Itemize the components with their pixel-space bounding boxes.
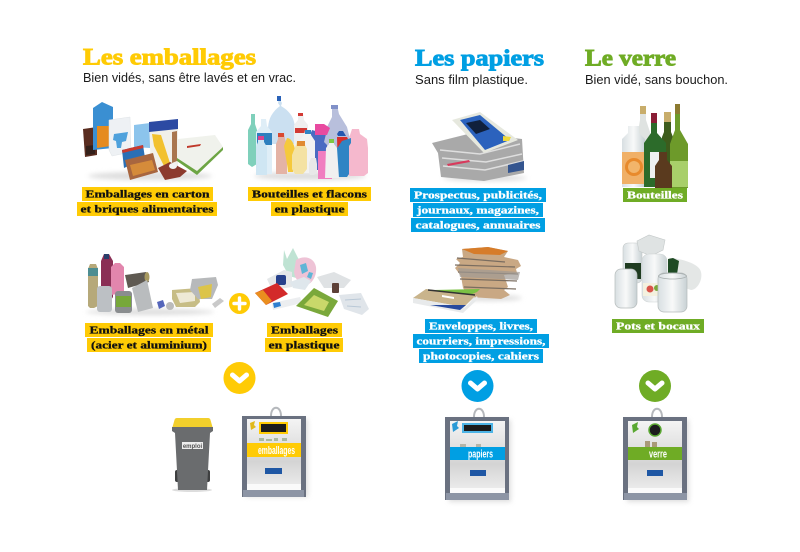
caption: pots et bocaux	[612, 319, 704, 333]
panel: le verre	[585, 46, 728, 502]
illustration: plastic bottles	[248, 96, 368, 180]
caption: bouteilles et flacons	[248, 187, 371, 216]
caption: bouteilles et flacons: en plastique	[274, 204, 345, 216]
caption: emballages en plastique: en plastique	[268, 340, 340, 352]
icon: yellow chevron	[224, 362, 256, 394]
caption: emballages en carton: et briques alimentaires	[80, 204, 214, 216]
illustration: wheeled bin: emploi	[183, 444, 202, 450]
caption: enveloppes	[413, 319, 549, 363]
illustration: emballages container poster: emballages	[258, 445, 295, 457]
caption: emballages en carton	[77, 187, 217, 216]
caption: enveloppes: photocopies, cahiers	[423, 350, 540, 362]
illustration: verre container poster	[623, 409, 689, 502]
illustration: cartons and drink cartons	[83, 102, 223, 180]
illustration: papiers container poster	[445, 409, 511, 502]
caption: emballages en metal: (acier et aluminium)	[91, 340, 207, 352]
illustration: emballages container poster	[242, 408, 308, 497]
caption: emballages en metal	[85, 323, 213, 352]
subheading: emballages: Bien vidés, sans être lavés et en vrac.	[83, 70, 296, 85]
caption: emballages en plastique	[265, 323, 343, 352]
illustration: verre container poster: verre	[649, 448, 667, 460]
illustration: metal packaging	[86, 254, 224, 315]
caption: emballages en carton: Emballages en carton	[86, 188, 210, 200]
icon: green chevron	[639, 370, 671, 402]
illustration: stack of envelopes and books	[413, 247, 522, 313]
illustration: glass jars	[615, 235, 701, 312]
caption: pots et bocaux: Pots et bocaux	[616, 320, 701, 332]
panel: les emballages	[77, 44, 371, 497]
heading: le verre: Le verre	[585, 46, 676, 70]
subheading: verre: Bien vidé, sans bouchon.	[585, 72, 728, 87]
illustration: plastic packaging	[255, 248, 369, 317]
heading: les emballages: Les emballages	[83, 44, 256, 70]
illustration: papiers container poster: papiers	[468, 448, 493, 460]
illustration: glass bottles	[622, 104, 688, 188]
caption: bouteilles	[623, 188, 687, 202]
icon: blue chevron	[462, 370, 494, 402]
icon: plus	[229, 293, 250, 314]
caption: prospectus: catalogues, annuaires	[416, 220, 541, 232]
caption: enveloppes: Enveloppes, livres,	[429, 320, 533, 332]
caption: bouteilles et flacons: Bouteilles et flacons	[252, 188, 368, 200]
caption: bouteilles: Bouteilles	[627, 190, 684, 202]
illustration: stack of magazines	[432, 112, 527, 181]
subheading: papiers: Sans film plastique.	[415, 72, 528, 87]
caption: prospectus: journaux, magazines,	[416, 204, 539, 216]
illustration: wheeled bin	[172, 418, 213, 492]
heading: les papiers: Les papiers	[415, 46, 544, 70]
caption: enveloppes: courriers, impressions,	[416, 336, 546, 348]
caption: emballages en metal: Emballages en métal	[90, 324, 208, 336]
caption: emballages en plastique: Emballages	[271, 324, 339, 336]
panel: les papiers	[410, 46, 549, 502]
caption: prospectus: Prospectus, publicités,	[414, 190, 542, 202]
caption: prospectus	[410, 188, 546, 232]
